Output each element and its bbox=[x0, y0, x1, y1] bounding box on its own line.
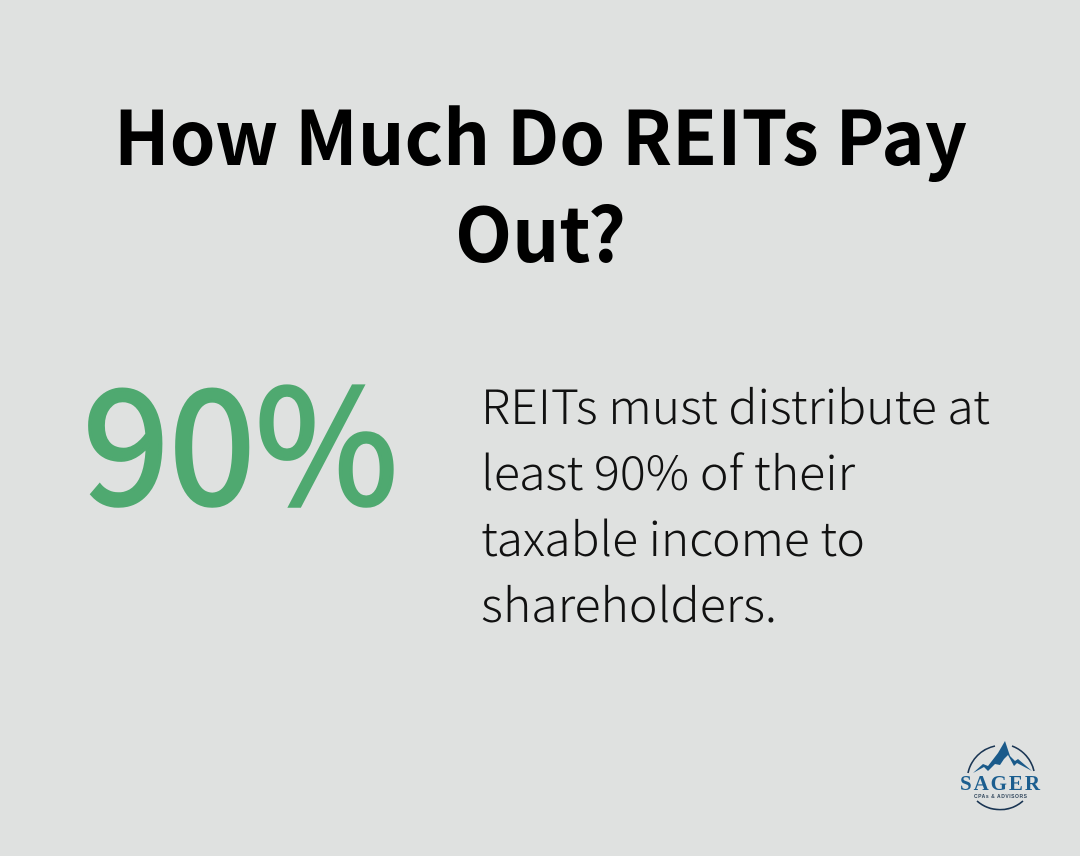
description text: taxable income to bbox=[481, 501, 865, 570]
big stat: 90%: 90% bbox=[83, 321, 398, 550]
title bbox=[114, 78, 967, 284]
description text bbox=[481, 369, 990, 636]
title: How Much Do REITs Pay bbox=[114, 78, 967, 187]
logo: Sager CPAs & Advisors: SAGER bbox=[960, 771, 1041, 795]
logo: Sager CPAs & Advisors: CPAs & ADVISORS bbox=[974, 794, 1028, 800]
title: Out? bbox=[455, 175, 626, 284]
description text: REITs must distribute at bbox=[481, 369, 990, 438]
description text: shareholders. bbox=[481, 567, 777, 636]
description text: least 90% of their bbox=[481, 435, 855, 504]
logo: Sager CPAs & Advisors bbox=[960, 741, 1041, 810]
